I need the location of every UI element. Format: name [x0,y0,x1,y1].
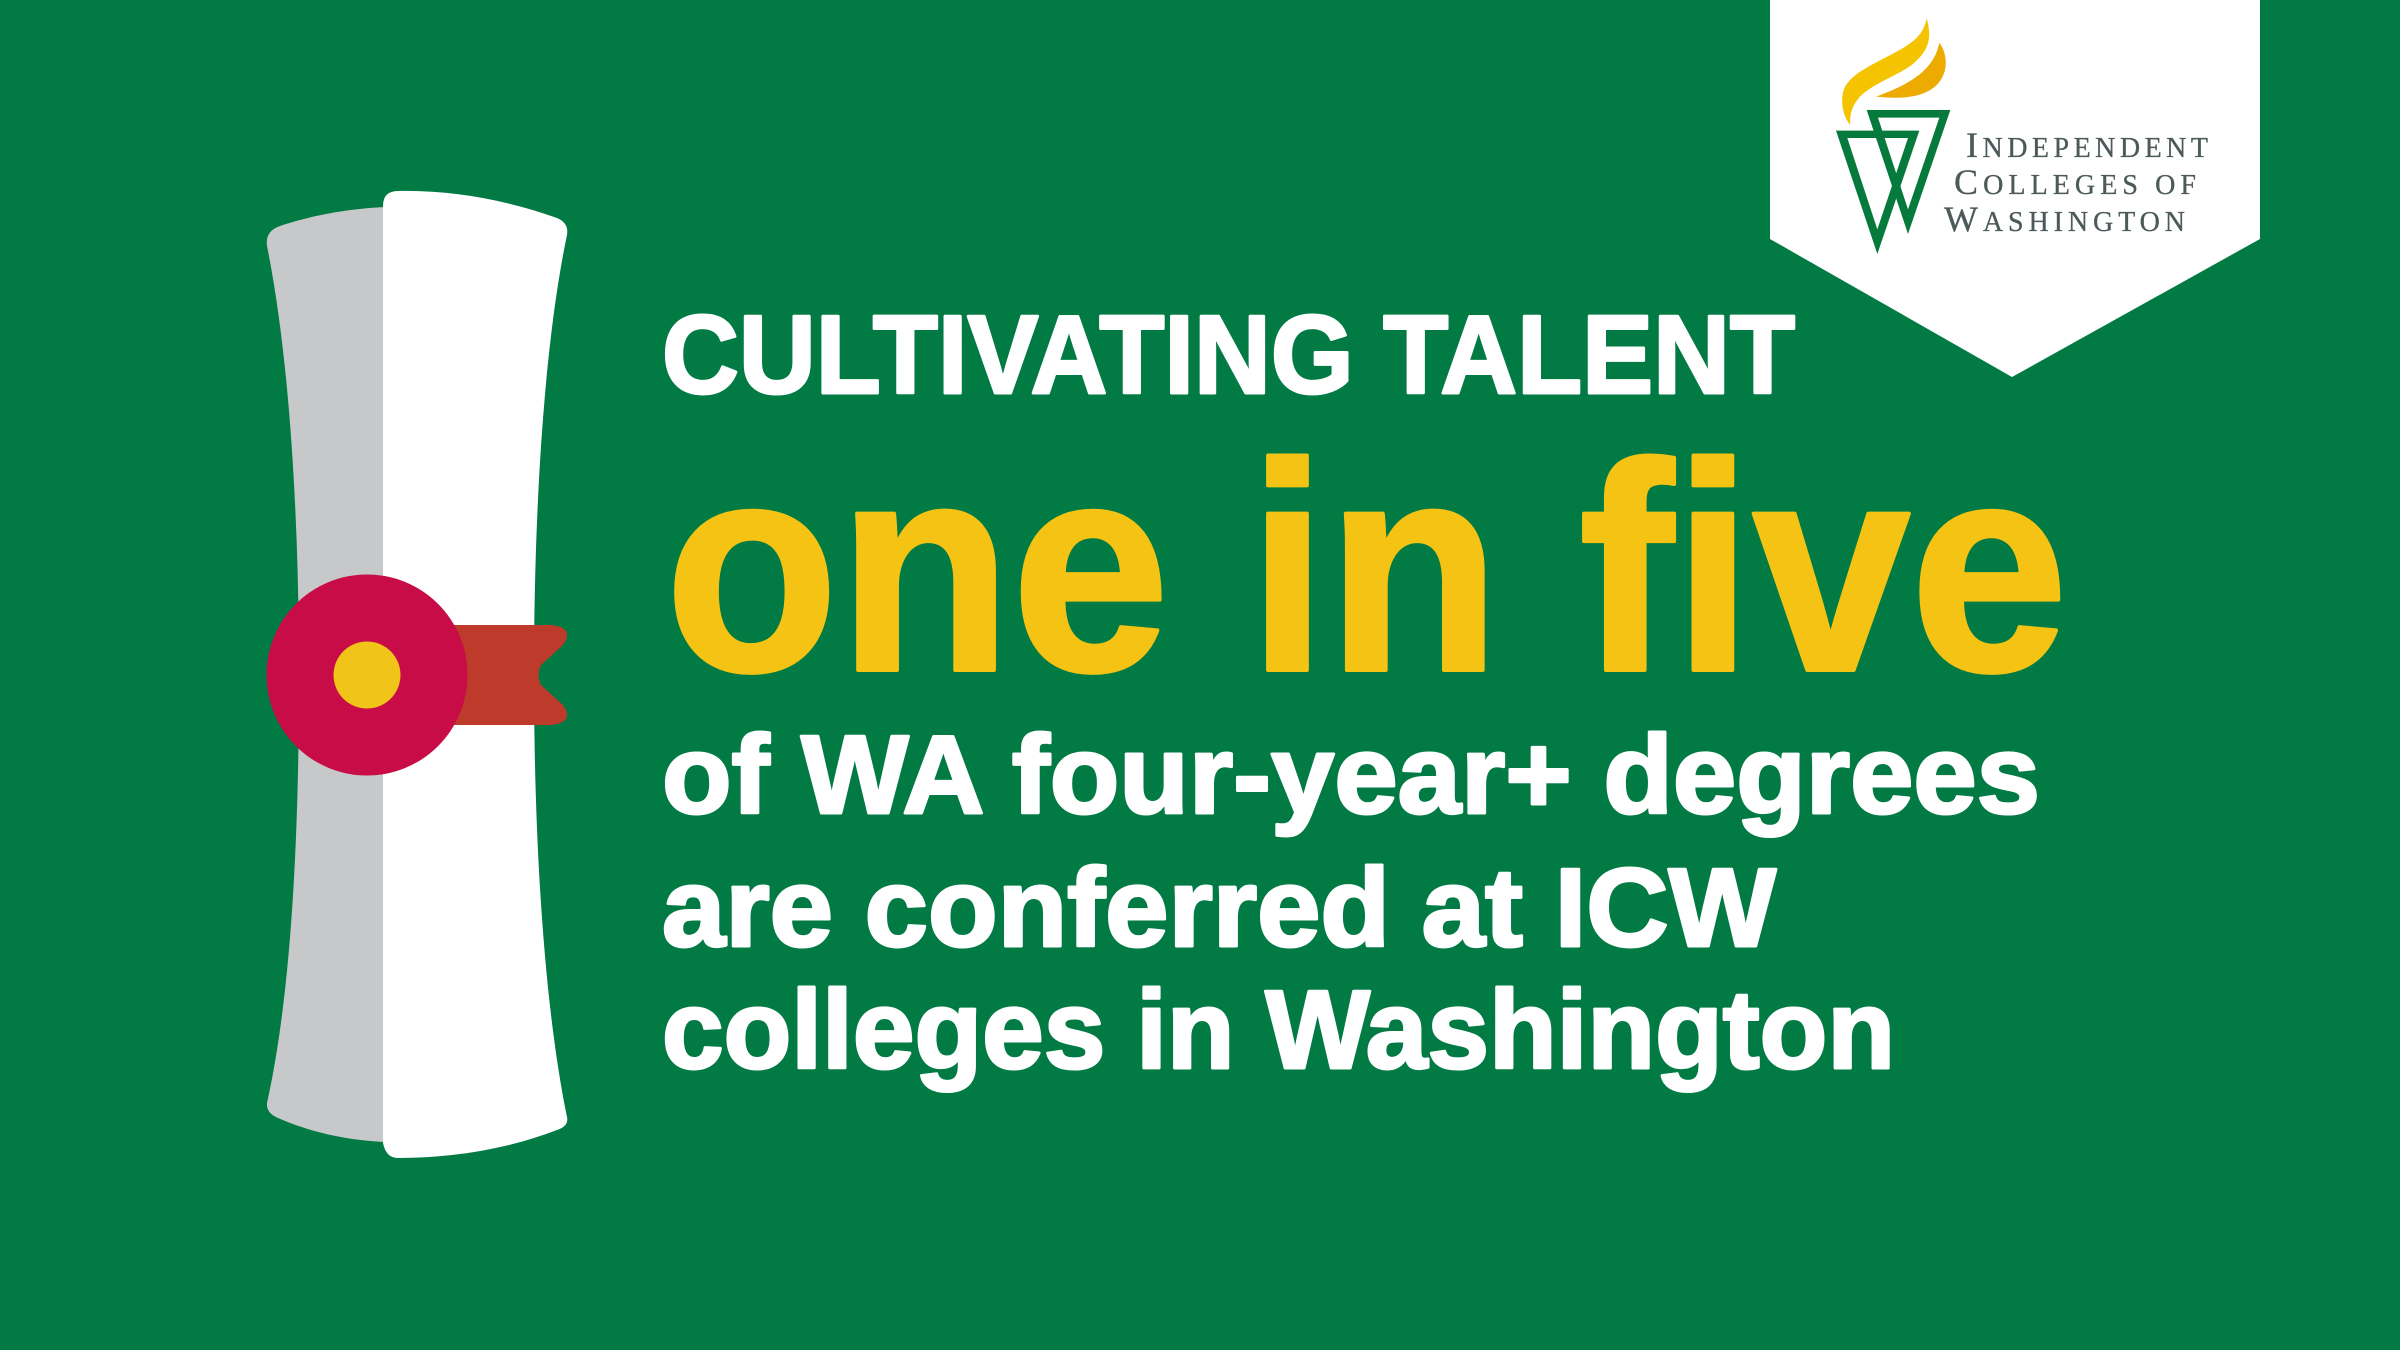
green W triangle right [1867,110,1950,234]
body line 2: are conferred at ICW [662,846,1776,970]
logo line 1: INDEPENDENT [1966,125,2208,165]
flame: amber [1876,43,1946,98]
logo text [1944,125,2208,239]
scroll front: white [383,191,567,1158]
seal centre dot [334,642,400,708]
seal [266,574,468,776]
banner shape [1770,0,2260,377]
body line 3: colleges in Washington [662,968,1895,1092]
body line 1: of WA four-year+ degrees [662,713,2040,837]
ribbon [367,625,567,725]
icon: torch logo [1836,18,1950,254]
flame: yellow [1842,18,1929,125]
logo line 3: WASHINGTON [1944,199,2185,239]
heading: CULTIVATING TALENT [662,293,1795,417]
big statistic: one in five [665,402,2068,733]
scroll back: grey [267,207,385,1142]
icon: diploma scroll [266,191,567,1158]
logo line 2: COLLEGES OF [1954,162,2196,202]
green W triangle left [1836,131,1919,254]
panel: logo banner [1770,0,2260,377]
